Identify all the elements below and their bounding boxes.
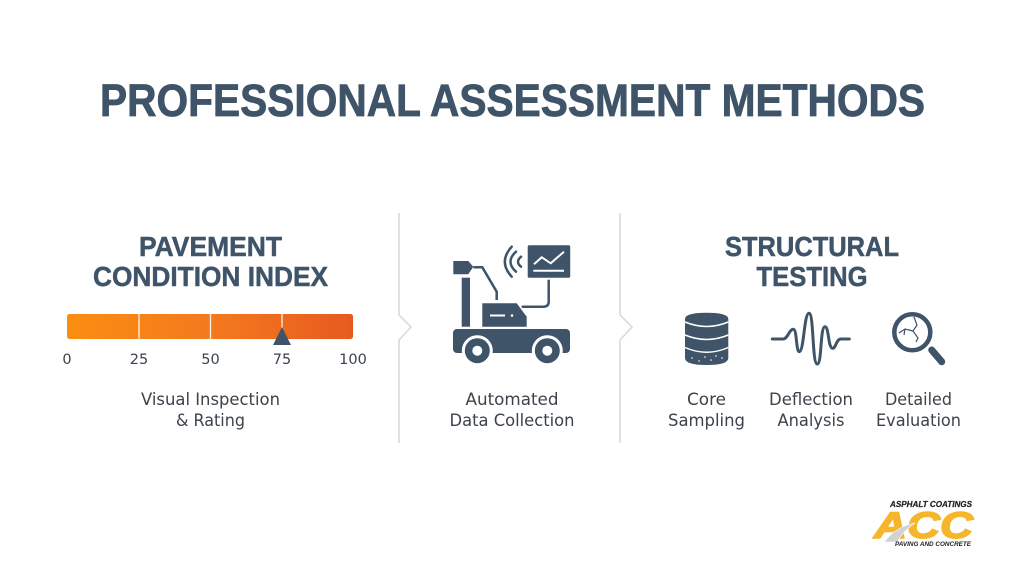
scale labels: 50 bbox=[201, 352, 220, 368]
logo: ACC bbox=[873, 500, 975, 548]
title: PROFESSIONAL ASSESSMENT METHODS bbox=[100, 75, 925, 126]
icon: deflection waveform bbox=[772, 313, 849, 364]
caption: visual inspection: Visual Inspection bbox=[141, 390, 280, 410]
heading: pavement condition index bbox=[93, 231, 328, 292]
captions: testing methods: Core bbox=[687, 390, 726, 410]
scale labels: 100 bbox=[339, 352, 367, 368]
icon: core sample bbox=[685, 313, 728, 365]
caption: automated data collection: Automated bbox=[466, 390, 558, 410]
captions: testing methods: Deflection bbox=[769, 390, 853, 410]
caption: automated data collection: Data Collection bbox=[450, 411, 574, 431]
captions: testing methods bbox=[668, 390, 961, 431]
captions: testing methods: Sampling bbox=[668, 411, 745, 431]
panel: pavement condition index bbox=[62, 231, 367, 431]
heading: structural testing: STRUCTURAL bbox=[725, 231, 899, 262]
logo: ACC: PAVING AND CONCRETE bbox=[895, 541, 972, 548]
panel: structural testing bbox=[668, 231, 961, 431]
heading: pavement condition index: PAVEMENT bbox=[139, 231, 282, 262]
icon: survey truck bbox=[453, 245, 570, 366]
scale labels: 25 bbox=[130, 352, 148, 368]
panel: automated data collection bbox=[450, 245, 574, 431]
scale labels: 0 bbox=[62, 352, 72, 368]
captions: testing methods: Detailed bbox=[885, 390, 952, 410]
captions: testing methods: Evaluation bbox=[876, 411, 961, 431]
marker at 75 bbox=[273, 327, 291, 345]
heading: structural testing bbox=[725, 231, 899, 292]
captions: testing methods: Analysis bbox=[778, 411, 845, 431]
logo: ACC: ACC bbox=[873, 505, 975, 546]
scale labels bbox=[62, 352, 367, 368]
caption: visual inspection: & Rating bbox=[176, 411, 245, 431]
caption: visual inspection bbox=[141, 390, 280, 431]
scale labels: 75 bbox=[273, 352, 291, 368]
heading: structural testing: TESTING bbox=[756, 261, 868, 292]
caption: automated data collection bbox=[450, 390, 574, 431]
logo: ACC: ASPHALT COATINGS bbox=[889, 500, 973, 509]
heading: pavement condition index: CONDITION INDEX bbox=[93, 261, 328, 292]
icon: magnifier with crack bbox=[894, 314, 942, 362]
gauge bar bbox=[67, 314, 353, 339]
